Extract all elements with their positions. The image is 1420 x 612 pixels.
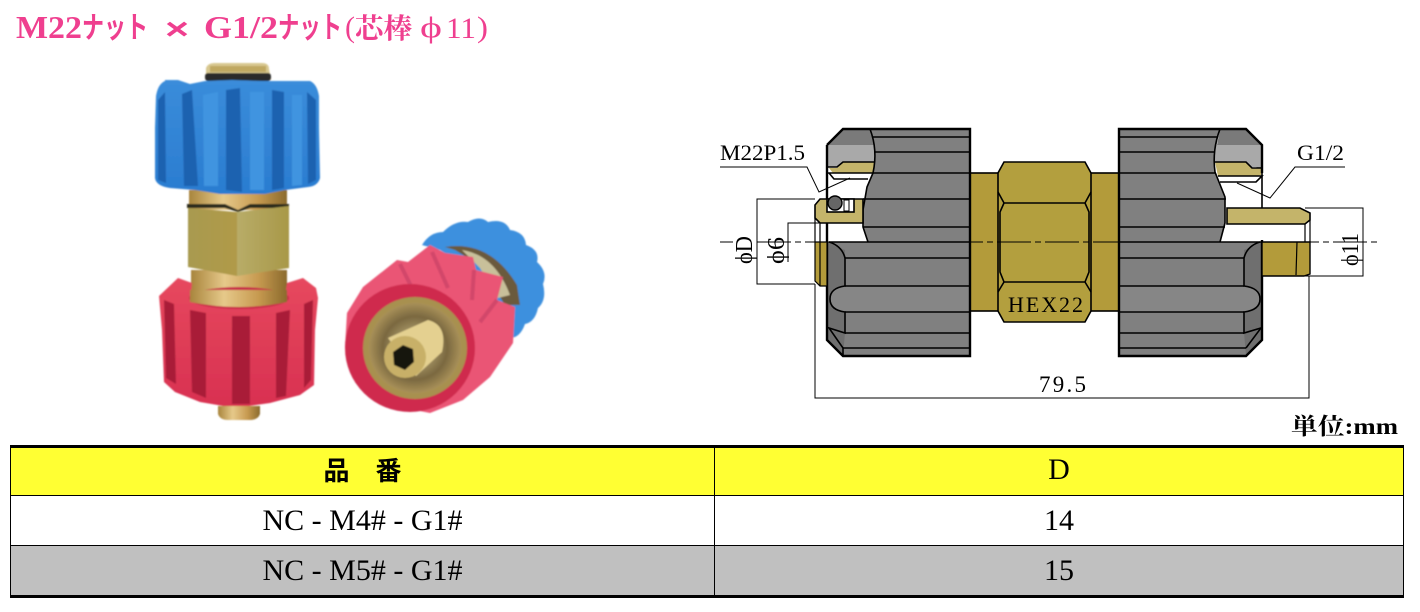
title: )	[477, 11, 488, 44]
row 1 part number	[10, 496, 715, 546]
red nut body with ribs	[345, 245, 515, 413]
title: M22	[16, 9, 82, 45]
header cell: part number: 品 番	[323, 457, 402, 486]
dimension: phi 6	[764, 223, 820, 264]
title: 芯棒	[353, 13, 412, 45]
centre line	[720, 241, 1377, 243]
red knurled nut	[159, 278, 318, 408]
photo: assembled adapter standing upright	[155, 63, 320, 420]
dimension: phi 11: ϕ11	[1338, 233, 1364, 266]
dimension: phi D	[732, 199, 815, 284]
row 1 value	[715, 496, 1404, 546]
dimension: overall length 79.5	[815, 276, 1309, 398]
title: G1/2	[204, 9, 278, 45]
blue knurled nut	[155, 80, 320, 194]
title: 11	[446, 12, 476, 45]
header cell: D	[715, 445, 1404, 496]
label: G1/2 with leader: G1/2	[1297, 140, 1344, 165]
title: ϕ	[420, 11, 442, 44]
brass hex and collars	[970, 162, 1119, 322]
row 1 value: 14	[1044, 504, 1074, 536]
photo: adapter seen from the threaded end	[345, 218, 545, 413]
table: part numbers and D dimension	[10, 445, 1404, 598]
brass ring and threads	[363, 297, 467, 399]
right brass spigot	[1227, 208, 1310, 276]
row 2 value	[715, 546, 1404, 598]
label: G1/2 with leader	[1237, 140, 1345, 198]
dimension: phi 6: ϕ6	[764, 237, 790, 264]
dimension: phi 11	[1305, 208, 1364, 276]
label: M22P1.5 with leader: M22P1.5	[720, 140, 805, 165]
diagram: cross-section drawing	[720, 129, 1377, 398]
title	[16, 3, 488, 47]
header cell: D: D	[1048, 453, 1070, 486]
row 1 part number: NC - M4# - G1#	[262, 504, 462, 536]
center stud with hex socket	[388, 320, 443, 376]
blue nut behind	[422, 218, 545, 338]
title: ×	[165, 13, 189, 46]
right nut	[1119, 129, 1262, 356]
unit label: 単位:mm	[1291, 414, 1398, 439]
brass neck and collar	[187, 190, 289, 304]
row 2 value: 15	[1044, 554, 1074, 586]
left nut	[827, 129, 970, 356]
dimension: overall length 79.5: 79.5	[1039, 372, 1086, 397]
header cell: part number	[10, 445, 715, 496]
row 2 part number: NC - M5# - G1#	[262, 554, 462, 586]
dimension: phi D: ϕD	[732, 236, 758, 264]
brass hex	[188, 206, 289, 276]
label: M22P1.5 with leader	[720, 140, 850, 192]
title: ナット	[278, 3, 342, 47]
brass top cap	[205, 63, 271, 81]
row 2 part number	[10, 546, 715, 598]
left brass spigot with O-ring	[815, 196, 863, 286]
brass bottom stud	[218, 406, 260, 420]
title: (	[345, 11, 355, 44]
label: HEX22: HEX22	[1008, 292, 1083, 317]
title: ナット	[82, 3, 148, 47]
